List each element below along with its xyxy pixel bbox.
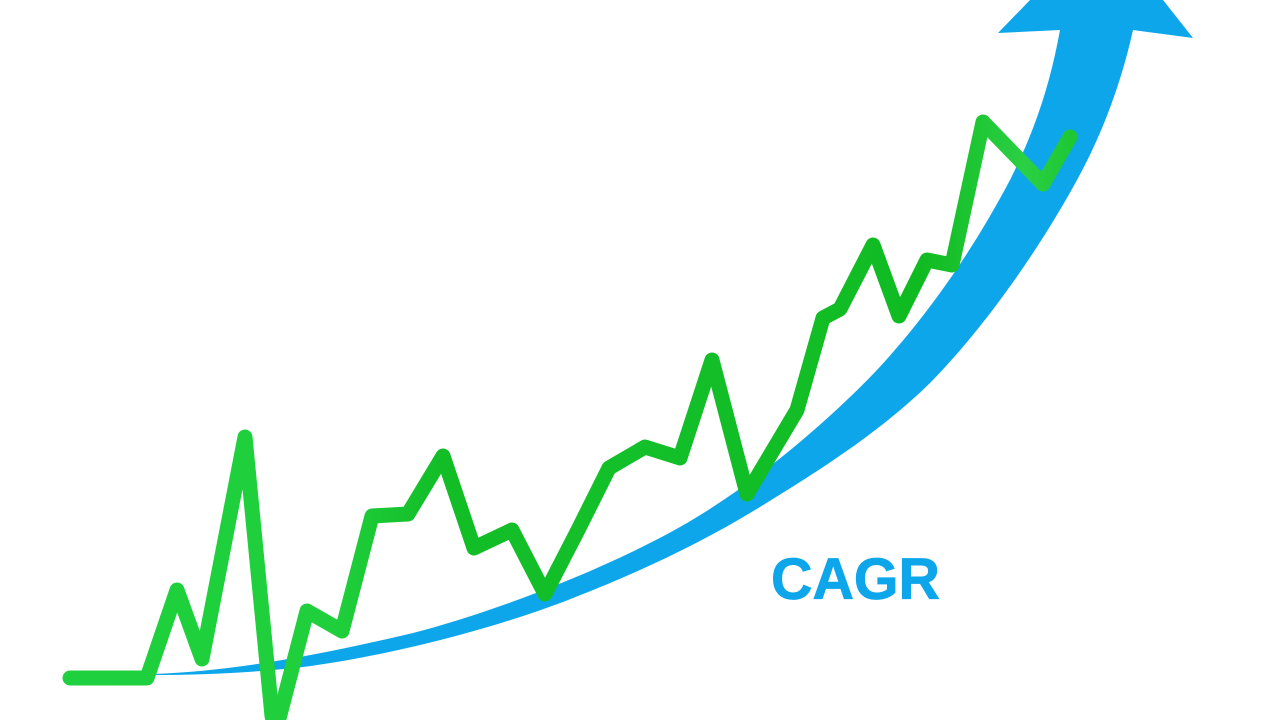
label: CAGR: CAGR — [771, 547, 940, 612]
arrow: blue CAGR growth curve — [150, 0, 1193, 675]
line chart: green fluctuating growth line — [70, 122, 1070, 720]
